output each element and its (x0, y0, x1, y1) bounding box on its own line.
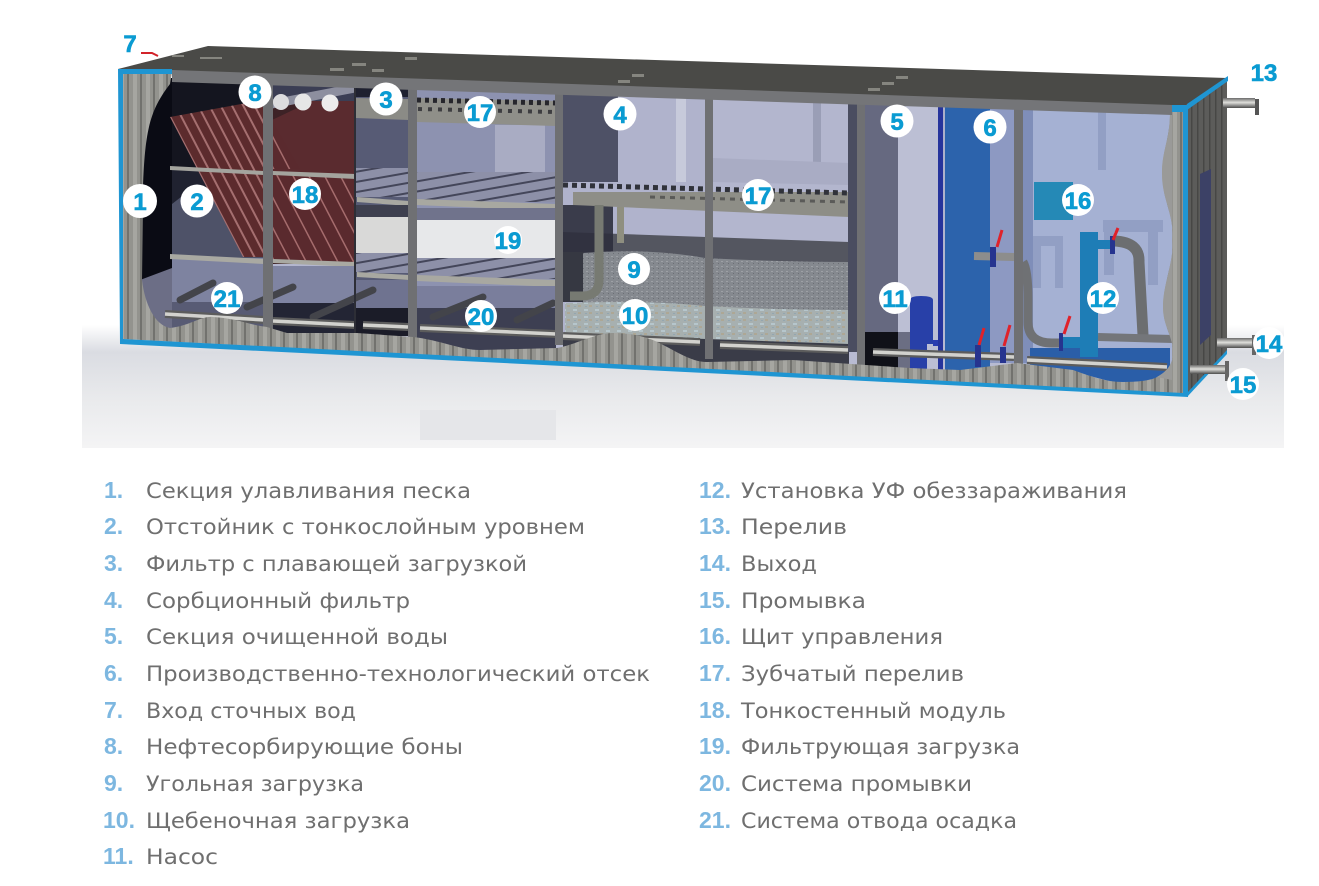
callout 6 (974, 110, 1006, 144)
callout 1 (123, 184, 157, 218)
legend: right column: 13. (699, 513, 731, 539)
legend: right column: Фильтрующая загрузка (741, 735, 1020, 760)
pipe 15 (1190, 361, 1229, 381)
toothed weir (573, 192, 849, 217)
legend: left column: Отстойник с тонкослойным уровнем (146, 515, 585, 540)
coal media (582, 251, 849, 312)
legend: left column: 6. (104, 660, 123, 686)
UV unit (1023, 228, 1173, 357)
callout 11 (879, 282, 911, 314)
callout 20: 20 (468, 304, 494, 331)
floor reflection (82, 325, 1284, 448)
legend: right column: Установка УФ обеззараживания (741, 479, 1127, 504)
top band (172, 70, 1172, 115)
riser pipe (570, 205, 599, 296)
callout 12: 12 (1090, 286, 1116, 313)
callout 9 (618, 253, 650, 285)
section: thin-layer module (272, 84, 356, 335)
callout 8 (238, 76, 272, 108)
callout 13: 13 (1251, 60, 1277, 87)
callout 10: 10 (622, 303, 648, 330)
callout 11: 11 (882, 286, 908, 313)
sludge collectors (180, 283, 553, 320)
water pool (1030, 348, 1170, 384)
callout 7: 7 (123, 31, 137, 58)
legend: right column: 18. (699, 697, 731, 723)
callout 3: 3 (379, 87, 393, 114)
dark layer (563, 232, 849, 270)
legend: left column (103, 477, 650, 870)
interior back wall (140, 78, 1180, 385)
main pipes (165, 314, 1167, 367)
oil-absorbing booms (272, 88, 355, 112)
legend: left column: Фильтр с плавающей загрузкой (146, 552, 527, 577)
legend: left column: 3. (104, 550, 123, 576)
legend: right column: 17. (699, 660, 731, 686)
pump (910, 296, 933, 370)
callout 2 (180, 184, 214, 218)
legend: left column: Сорбционный фильтр (146, 589, 410, 614)
legend: left column: 5. (104, 623, 123, 649)
legend: right column: 20. (699, 770, 731, 796)
callout 16: 16 (1065, 188, 1091, 215)
section: technological compartment wall (938, 105, 1014, 371)
callout 5 (880, 104, 914, 138)
section: settler (170, 80, 264, 332)
vertical dividers (263, 80, 1023, 370)
callout 6: 6 (983, 115, 997, 142)
callout 3 (370, 82, 402, 116)
outlet pipes (1190, 98, 1259, 381)
legend: right column: 19. (699, 733, 731, 759)
legend: right column (699, 477, 1127, 834)
legend: right column: Перелив (741, 515, 847, 540)
inner end panel (1157, 112, 1173, 380)
callout 5: 5 (890, 109, 904, 136)
callout 17 second: 17 (745, 183, 771, 210)
pipe 13 (1223, 98, 1259, 115)
control panel (1034, 182, 1073, 220)
legend: left column: 2. (104, 513, 123, 539)
legend: right column: 16. (699, 623, 731, 649)
bottom valves (975, 325, 1010, 367)
legend: right column: Промывка (741, 589, 866, 614)
legend: right column: Щит управления (741, 625, 943, 650)
legend: left column: Щебеночная загрузка (146, 809, 410, 834)
side door (1200, 169, 1211, 345)
callout 18: 18 (292, 182, 318, 209)
legend: left column: 9. (104, 770, 123, 796)
callout 8: 8 (248, 80, 262, 107)
legend: left column: 1. (104, 477, 123, 503)
section: clean water (848, 102, 943, 370)
under-floor pipe space (563, 334, 849, 372)
legend: right column: Выход (741, 552, 817, 577)
roof (118, 46, 1227, 106)
section: filter media (417, 88, 556, 353)
blue insulation edges (118, 69, 1228, 397)
legend: left column: 10. (103, 807, 135, 833)
valves on wall (974, 230, 1014, 267)
legend: right column: Тонкостенный модуль (740, 699, 1006, 724)
legend: right column: 15. (699, 587, 731, 613)
callout 4 (604, 98, 636, 130)
callout 2: 2 (190, 189, 204, 216)
legend: right column: 14. (699, 550, 731, 576)
filter media block (417, 220, 556, 260)
legend: left column: 4. (104, 587, 123, 613)
inlet pipe (141, 53, 158, 56)
callout 21: 21 (214, 286, 240, 313)
legend: left column: Нефтесорбирующие боны (146, 735, 463, 760)
callout 4: 4 (613, 102, 627, 129)
crushed stone media (565, 302, 849, 345)
legend: left column: Секция улавливания песка (146, 479, 471, 504)
legend: right column: 12. (699, 477, 731, 503)
legend: left column: Вход сточных вод (146, 699, 356, 724)
callout 14: 14 (1256, 331, 1283, 358)
callout 19: 19 (495, 228, 521, 255)
callout 15: 15 (1230, 372, 1256, 399)
legend: left column: 8. (104, 733, 123, 759)
thin-layer module (170, 100, 263, 257)
legend: left column: Насос (146, 845, 218, 870)
section: sorption filter (563, 92, 849, 372)
callout 17: 17 (467, 100, 493, 127)
legend: left column: 11. (103, 843, 134, 869)
legend: left column: 7. (104, 697, 123, 723)
pipe 14 (1217, 335, 1256, 355)
purification unit cross-section (118, 46, 1259, 397)
front corrugated skin (120, 72, 1185, 395)
legend: left column: Производственно-технологический отсек (146, 662, 650, 687)
legend: right column: 21. (699, 807, 731, 833)
section: floating media filter (356, 84, 409, 336)
callout 1: 1 (133, 189, 147, 216)
roof hatches (172, 55, 908, 91)
pipe shadows (1033, 110, 1163, 288)
toothed weir (417, 98, 556, 126)
section: grit chamber (140, 78, 172, 330)
section: UV compartment (1023, 108, 1173, 384)
shelf (170, 166, 264, 175)
callout 9: 9 (627, 257, 641, 284)
legend: left column: Секция очищенной воды (146, 625, 448, 650)
legend: right column: Зубчатый перелив (741, 662, 964, 687)
side face (1187, 78, 1227, 396)
legend: right column: Система отвода осадка (741, 809, 1017, 834)
legend: left column: Угольная загрузка (146, 772, 364, 797)
legend: right column: Система промывки (741, 772, 972, 797)
